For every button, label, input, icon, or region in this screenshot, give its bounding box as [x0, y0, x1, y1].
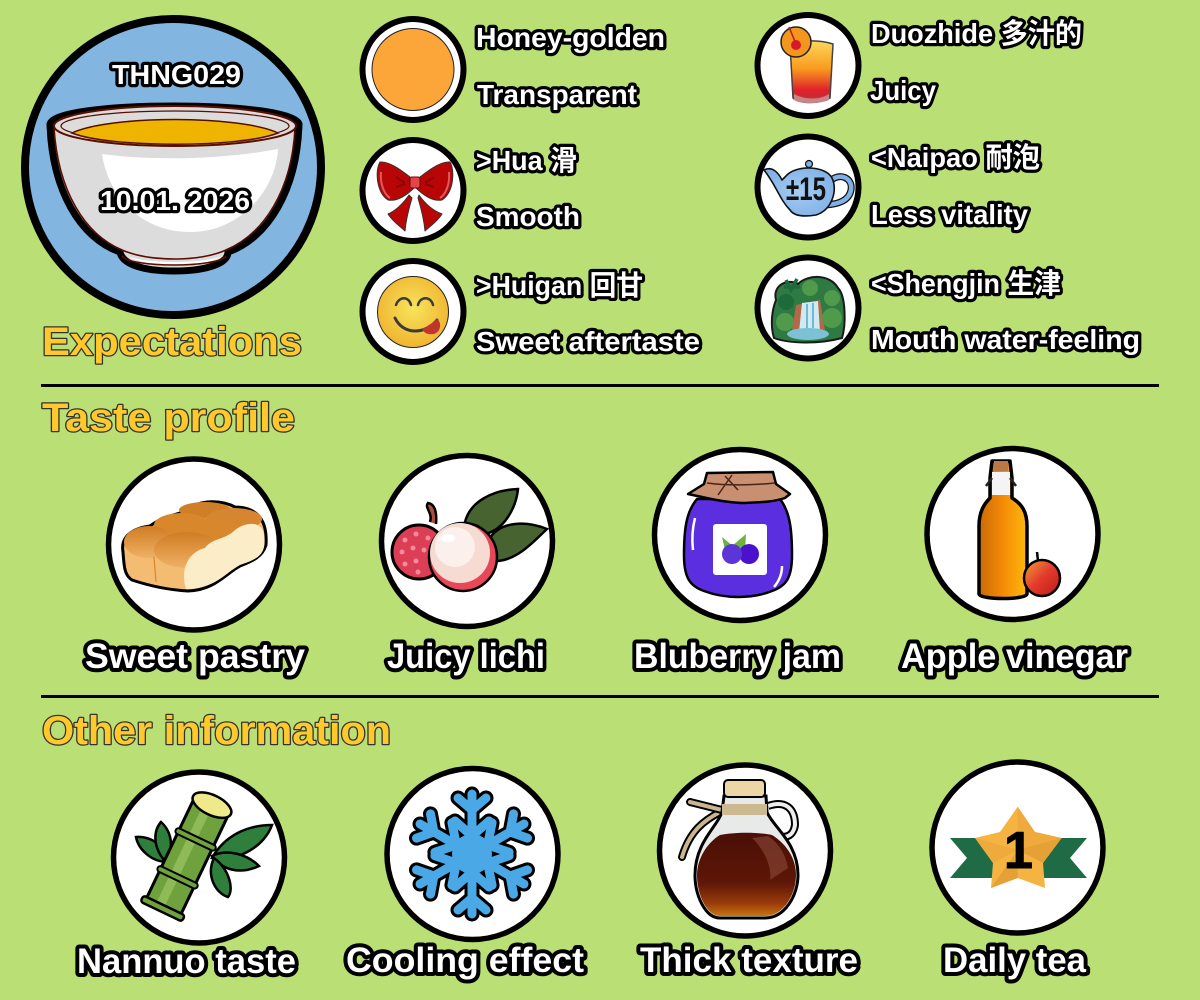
- item: duozhide juicy: [758, 15, 1082, 116]
- label: shengjin: <Shengjin 生津: [871, 268, 1061, 299]
- label: clarity: Transparent: [477, 79, 637, 110]
- taste: juicy lichi: [382, 456, 552, 676]
- label: Thick texture: [640, 941, 858, 980]
- icon: bread loaf: [123, 502, 266, 591]
- label: Bluberry jam: [634, 637, 841, 676]
- item: honey-golden transparent: [362, 19, 665, 120]
- icon: syrup jug: [682, 780, 798, 918]
- other: daily tea: [932, 762, 1103, 980]
- taste: sweet pastry: [85, 459, 306, 676]
- heading: Taste profile: Taste profile: [42, 396, 295, 440]
- label: Daily tea: [943, 941, 1087, 980]
- label: Nannuo taste: [77, 942, 296, 981]
- icon: jam jar: [684, 472, 792, 597]
- item: shengjin mouth water feeling: [758, 258, 1140, 358]
- icon: lichi with leaves: [392, 489, 547, 591]
- date: 10.01. 2026: [100, 185, 250, 216]
- label: Sweet pastry: [85, 637, 306, 676]
- icon: tea bowl: [50, 106, 299, 271]
- icon: cocktail: [781, 27, 833, 103]
- taste: bluberry jam: [634, 450, 841, 676]
- other: cooling effect: [346, 768, 584, 980]
- icon: orange disc: [372, 28, 454, 110]
- icon: star ribbon badge: [950, 807, 1087, 888]
- teapot number: ±15: [786, 171, 826, 207]
- item: naipao less vitality: [758, 136, 1040, 238]
- heading: Other information: Other information: [42, 709, 391, 753]
- rank number: 1: [1004, 822, 1033, 880]
- label: sweet aftertaste: Sweet aftertaste: [476, 326, 700, 357]
- item: hua smooth: [362, 140, 580, 241]
- label: hua: >Hua 滑: [476, 145, 577, 176]
- label: mouth water-feeling: Mouth water-feeling: [871, 324, 1140, 355]
- heading: Expectations: Expectations: [42, 320, 302, 364]
- icon: bamboo with leaves: [136, 786, 272, 922]
- tea badge: [25, 19, 321, 315]
- label: Cooling effect: [346, 941, 584, 980]
- label: Juicy lichi: [387, 637, 545, 676]
- label: Apple vinegar: [901, 637, 1128, 676]
- icon: snowflake: [412, 794, 532, 914]
- icon: smiley with tongue: [378, 276, 448, 348]
- other: thick texture: [640, 765, 858, 980]
- label: juicy: Juicy: [870, 75, 936, 106]
- label: smooth: Smooth: [476, 201, 580, 232]
- icon: red bow: [377, 162, 453, 231]
- label: huigan: >Huigan 回甘: [476, 270, 643, 301]
- icon: vinegar bottle and apple: [979, 461, 1060, 598]
- label: duozhide: Duozhide 多汁的: [871, 18, 1082, 49]
- icon: teapot: [764, 160, 851, 216]
- other: nannuo taste: [77, 772, 296, 981]
- label: naipao: <Naipao 耐泡: [871, 142, 1040, 173]
- tea code: THNG029: [112, 59, 241, 90]
- item: huigan sweet aftertaste: [362, 261, 700, 362]
- label: less vitality: Less vitality: [871, 199, 1028, 230]
- icon: waterfall in jungle: [772, 277, 845, 342]
- taste: apple vinegar: [901, 448, 1128, 676]
- label: colour: Honey-golden: [476, 22, 665, 53]
